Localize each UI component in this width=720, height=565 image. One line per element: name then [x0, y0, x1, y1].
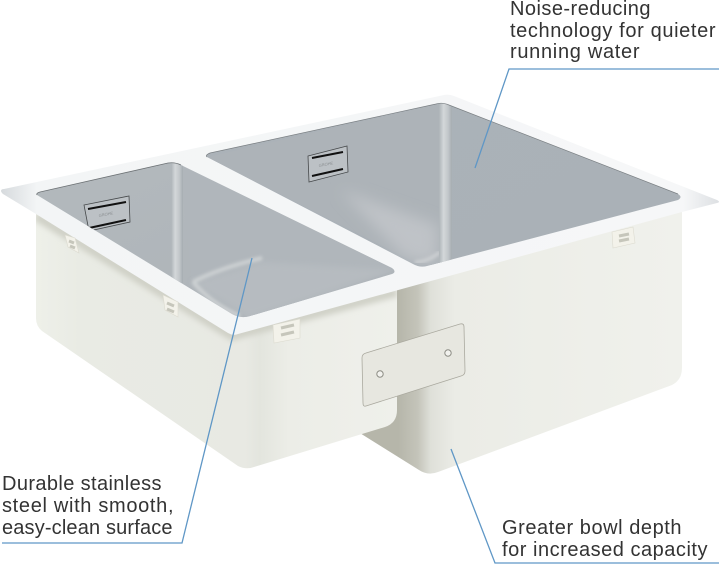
- callout: durable stainless steel: easy-clean surface: [2, 517, 173, 539]
- callout: durable stainless steel: [2, 258, 252, 543]
- overflow: left bowl: [84, 196, 130, 231]
- sink body: left bowl: [36, 210, 397, 468]
- overflow: right bowl: GROHE: [318, 160, 334, 168]
- callout: durable stainless steel: steel with smooth,: [2, 495, 174, 517]
- callout: noise-reducing: technology for quieter: [510, 20, 716, 42]
- callout: noise-reducing: running water: [510, 41, 640, 63]
- callout: greater bowl depth: [451, 449, 719, 563]
- callout: noise-reducing: [475, 0, 719, 168]
- callout: durable stainless steel: Durable stainless: [2, 473, 162, 495]
- rim: [1, 95, 719, 335]
- overflow: left bowl: GROHE: [98, 210, 114, 218]
- mounting bracket: [362, 324, 465, 406]
- left bowl basin: [37, 163, 394, 318]
- mounting clips: [65, 227, 635, 343]
- overflow: right bowl: [308, 146, 348, 182]
- callout: greater bowl depth: Greater bowl depth: [502, 517, 682, 539]
- callout: greater bowl depth: for increased capacity: [502, 539, 708, 561]
- right bowl basin: [200, 100, 690, 270]
- sink body: right bowl with side wall: [355, 205, 682, 474]
